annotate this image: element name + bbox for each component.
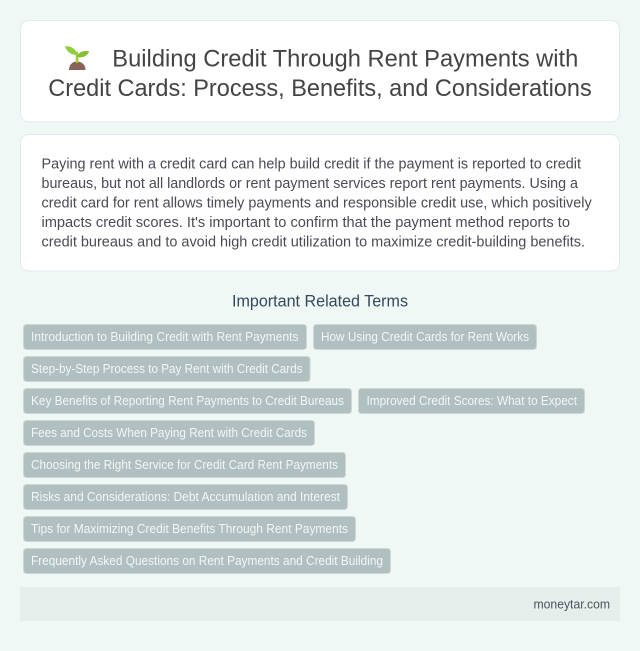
- chip: improved scores: [358, 388, 584, 414]
- footer: [20, 587, 620, 621]
- chip: risks: Risks and Considerations: Debt Accumulation and Interest: [31, 489, 340, 504]
- chip: risks: [24, 484, 348, 510]
- chip: faq: [24, 548, 390, 574]
- chip: tips: Tips for Maximizing Credit Benefits Through Rent Payments: [31, 521, 348, 536]
- title text: [48, 46, 592, 102]
- chip: how it works: [314, 324, 536, 350]
- description text: [42, 155, 592, 250]
- chip: introduction: [24, 324, 306, 350]
- title text: Building Credit Through Rent Payments with: [112, 46, 578, 73]
- chip: faq: Frequently Asked Questions on Rent Payments and Credit Building: [31, 553, 383, 568]
- chip: step by step: [24, 356, 310, 382]
- description text: credit card for rent allows timely payments and responsible credit use, which positively: [42, 194, 592, 211]
- chip: choosing service: [24, 452, 346, 478]
- chip: step by step: Step-by-Step Process to Pay Rent with Credit Cards: [31, 361, 303, 376]
- heading: important related terms: Important Related Terms: [232, 292, 408, 311]
- description text: credit bureaus and to avoid high credit utilization to maximize credit-building benefits.: [42, 233, 585, 250]
- description text: impacts credit scores. It's important to confirm that the payment method reports to: [42, 214, 570, 231]
- icon: seedling: [65, 46, 89, 70]
- title text: Credit Cards: Process, Benefits, and Considerations: [48, 75, 592, 102]
- chip: improved scores: Improved Credit Scores: What to Expect: [366, 393, 577, 408]
- chip: choosing service: Choosing the Right Service for Credit Card Rent Payments: [31, 457, 338, 472]
- chip: fees and costs: [24, 420, 314, 446]
- panel: related terms chips: [24, 324, 584, 574]
- chip: key benefits: [24, 388, 352, 414]
- chip: tips: [24, 516, 356, 542]
- description text: Paying rent with a credit card can help build credit if the payment is reported to credit: [42, 155, 582, 172]
- chip: key benefits: Key Benefits of Reporting Rent Payments to Credit Bureaus: [31, 393, 344, 408]
- chip: introduction: Introduction to Building Credit with Rent Payments: [31, 329, 299, 344]
- panel: title card: [20, 20, 620, 122]
- panel: description: [20, 134, 620, 271]
- chip: fees and costs: Fees and Costs When Paying Rent with Credit Cards: [31, 425, 307, 440]
- footer: moneytar.com: [534, 596, 610, 611]
- chip: how it works: How Using Credit Cards for Rent Works: [321, 329, 529, 344]
- description text: bureaus, but not all landlords or rent payment services report rent payments. Using a: [42, 175, 579, 192]
